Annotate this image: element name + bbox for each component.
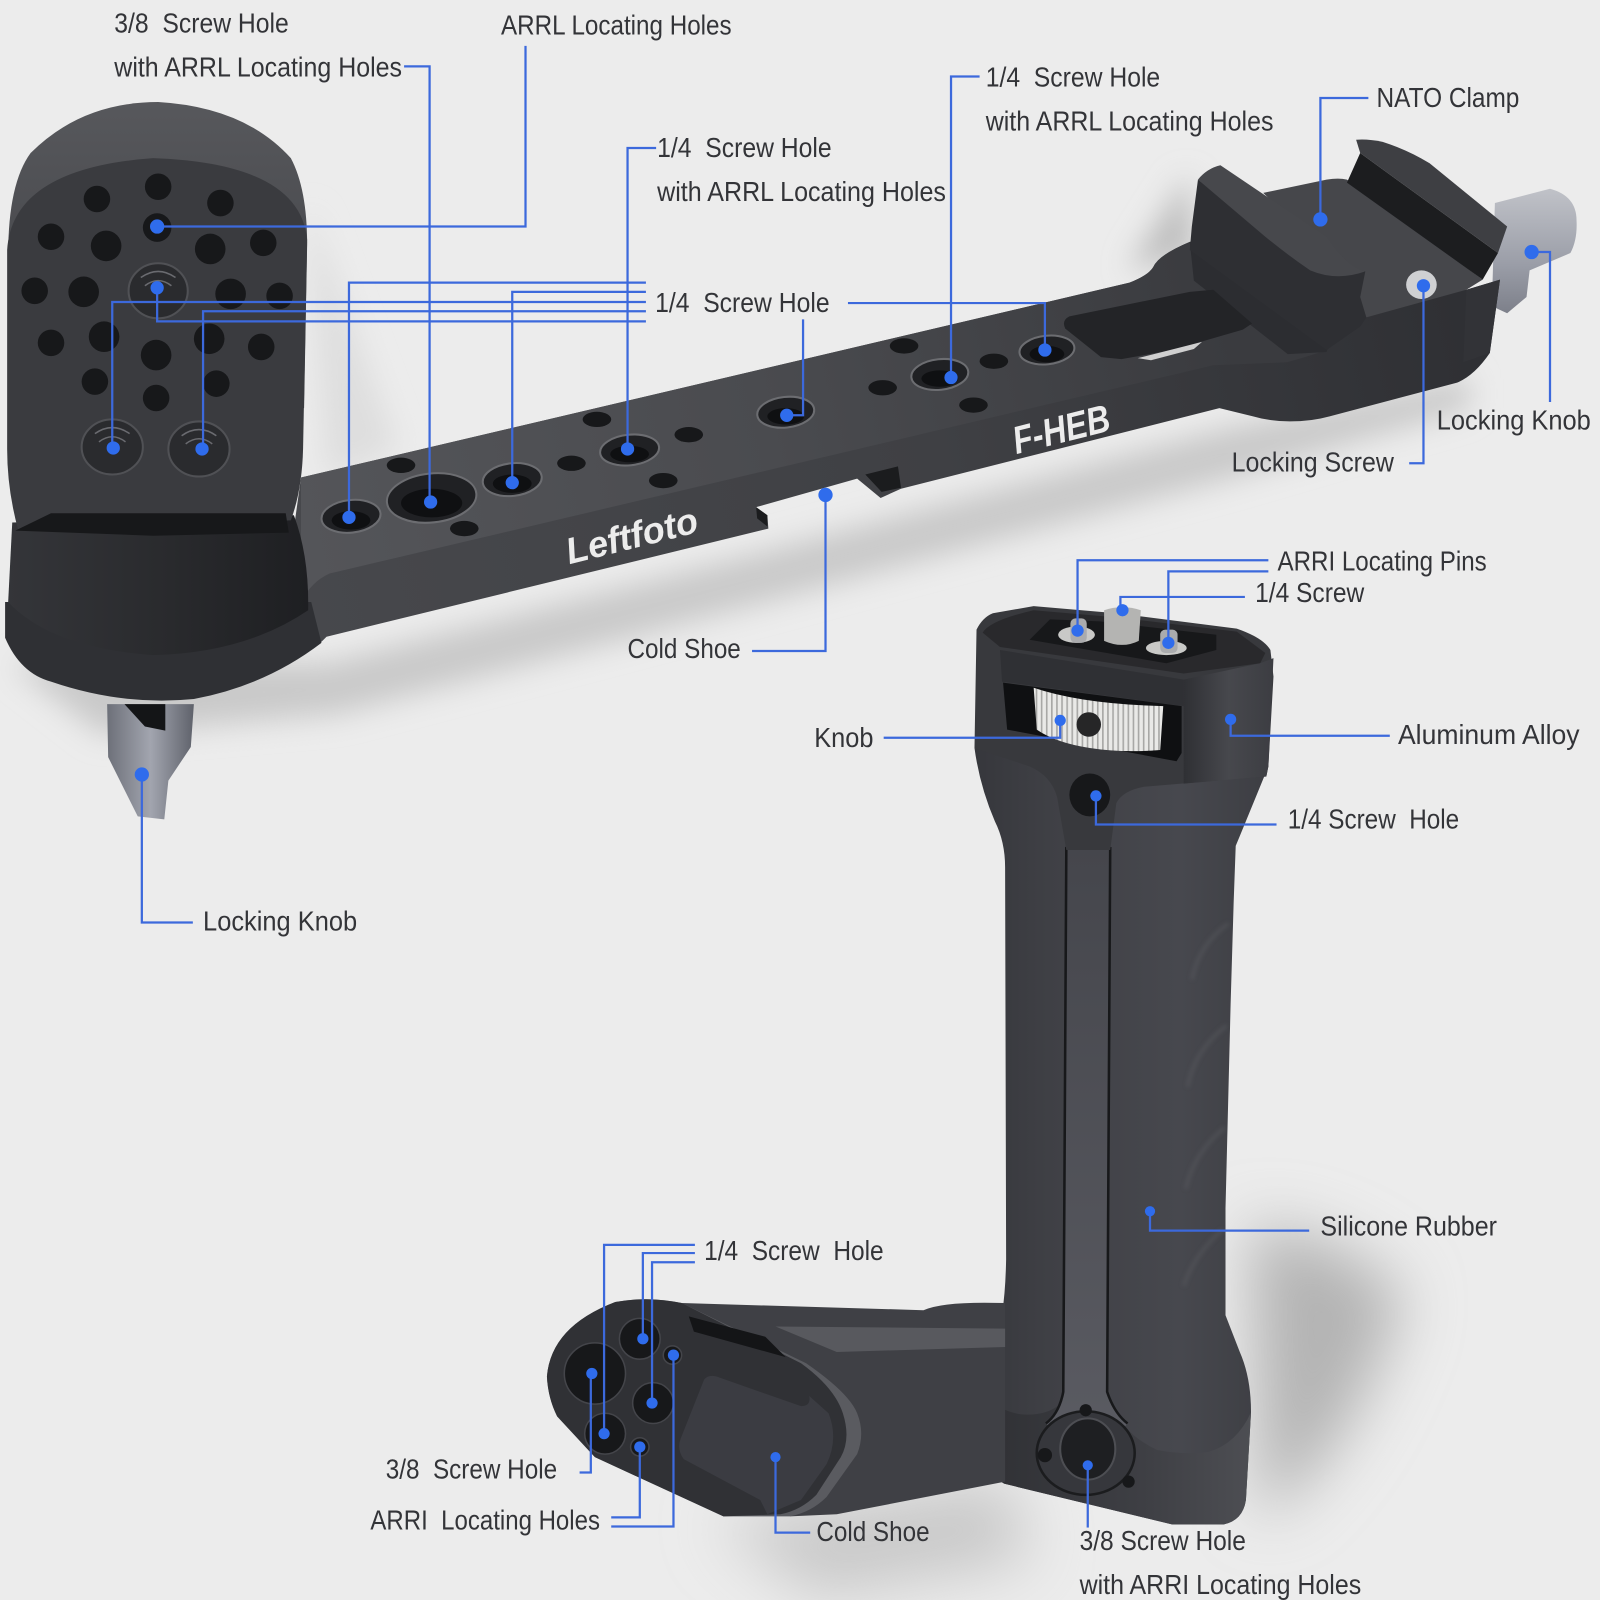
product: mounting arm <box>107 140 1577 819</box>
label: Cold Shoe <box>628 633 741 664</box>
label: Locking Knob <box>1437 405 1591 436</box>
callout: locking screw <box>1232 279 1430 477</box>
callout: ARRL locating holes <box>150 10 732 234</box>
label: Locking Screw <box>1232 446 1394 477</box>
callout: cold shoe arm <box>628 488 833 664</box>
label: Locking Knob <box>203 906 357 937</box>
leader <box>752 495 826 651</box>
arm top face <box>301 242 1327 602</box>
leader <box>1409 286 1423 463</box>
label: Knob <box>814 722 873 753</box>
callout: NATO clamp <box>1313 82 1519 227</box>
leader <box>157 46 526 227</box>
callout: 3/8 screw hole lower <box>386 1368 597 1485</box>
front panel <box>1000 650 1184 706</box>
callout: 3/8 screw hole top: with ARRL Locating Holes <box>113 52 402 83</box>
end face rim <box>547 1299 861 1516</box>
callout: ARRI locating holes lower <box>370 1349 679 1536</box>
arm small holes <box>387 338 1008 536</box>
label: ARRI Locating Pins <box>1278 545 1487 576</box>
leader <box>628 148 656 449</box>
callout: silicone rubber <box>1145 1206 1497 1242</box>
leaders <box>112 283 1045 517</box>
rear knob <box>1492 189 1577 313</box>
end face <box>547 1299 846 1516</box>
callout: 3/8 screw hole bottom: with ARRI Locating Holes <box>1079 1569 1361 1600</box>
handle top block <box>974 606 1273 850</box>
leaders <box>611 1355 673 1527</box>
label: Cold Shoe <box>816 1516 930 1547</box>
callout: locking knob right <box>1437 245 1591 436</box>
leader <box>884 720 1060 738</box>
locking screw <box>1406 270 1437 299</box>
bottom hole ring <box>1037 1411 1135 1495</box>
callout: 1/4 screw hole group <box>107 281 1052 524</box>
label: Aluminum Alloy <box>1398 719 1580 750</box>
head face <box>7 158 307 531</box>
callout: 1/4 screw hole with locating holes, right: with ARRL Locating Holes <box>985 106 1273 137</box>
label: ARRI Locating Holes <box>370 1505 600 1536</box>
handle body <box>974 748 1268 1524</box>
leader <box>1320 98 1368 219</box>
callout: aluminum alloy <box>1225 714 1580 750</box>
horizontal handle body <box>682 1303 1005 1516</box>
callout: 1/4 screw hole with locating holes, right <box>944 62 1273 384</box>
head dome <box>8 102 307 408</box>
product: lower horizontal handle <box>547 1299 1005 1516</box>
wedge <box>15 513 289 536</box>
model: F-HEB: F-HEB <box>1008 397 1115 463</box>
callout: 1/4 screw hole handle <box>1090 790 1459 835</box>
callout: 1/4 screw hole with locating holes, center: with ARRL Locating Holes <box>656 176 946 207</box>
NATO clamp left jaw front <box>1190 180 1366 350</box>
callout: 1/4 screw hole with locating holes, center <box>621 132 946 456</box>
cold shoe slot <box>689 1316 786 1357</box>
NATO clamp plate <box>1263 179 1483 317</box>
leader <box>1120 597 1245 610</box>
product: head plate <box>5 102 321 701</box>
bottom ring notches <box>1038 1404 1135 1488</box>
label: Silicone Rubber <box>1320 1211 1497 1242</box>
label: NATO Clamp <box>1377 82 1519 113</box>
leaders <box>1078 560 1268 643</box>
leader <box>1231 719 1390 736</box>
grip ridges <box>1184 923 1229 1286</box>
flange ridge <box>1190 237 1332 354</box>
callout: 1/4 screw hole lower <box>598 1235 884 1439</box>
head hole threads <box>95 271 216 444</box>
top plate <box>983 610 1265 673</box>
leader <box>1087 1465 1089 1528</box>
top screw hole <box>1069 773 1110 816</box>
label: 1/4 Screw <box>1255 577 1364 608</box>
end face holes <box>564 1318 682 1456</box>
knob hole <box>1077 712 1101 737</box>
leader <box>142 774 193 922</box>
callout: locking knob left <box>135 767 357 937</box>
leader <box>580 1373 591 1472</box>
center strip <box>1046 847 1128 1469</box>
label: 3/8 Screw Hole <box>386 1454 557 1485</box>
knob window <box>1003 683 1182 761</box>
arm threaded holes <box>320 333 1076 536</box>
leaders <box>604 1245 695 1434</box>
callout: knob <box>814 715 1066 753</box>
brand: Leftfoto: Leftfoto <box>561 500 702 572</box>
label: 1/4 Screw Hole <box>986 62 1160 93</box>
NATO clamp right jaw <box>1347 153 1498 280</box>
leader <box>1532 252 1550 402</box>
label: ARRL Locating Holes <box>501 10 732 41</box>
right cheek of top block <box>1184 658 1273 784</box>
handle top highlight <box>776 1327 1005 1352</box>
callout: 3/8 screw hole bottom <box>1079 1460 1361 1600</box>
label: 3/8 Screw Hole <box>1080 1525 1246 1556</box>
top plate recess <box>1030 619 1216 663</box>
label: 1/4 Screw Hole <box>657 132 832 163</box>
cold shoe recess <box>679 1376 833 1514</box>
callout: 1/4 screw <box>1116 577 1364 616</box>
leader <box>1096 796 1277 824</box>
arm band <box>286 242 1500 653</box>
label: 1/4 Screw Hole <box>655 287 830 318</box>
head base lower disc <box>5 602 321 701</box>
bottom threaded hole <box>1060 1418 1115 1480</box>
label: 1/4 Screw Hole <box>1288 804 1459 835</box>
callout: ARRI locating pins <box>1071 545 1487 649</box>
callout: 3/8 screw hole top <box>113 8 437 509</box>
slot <box>1064 290 1252 359</box>
cold shoe rails <box>756 466 901 527</box>
end block <box>1463 280 1500 362</box>
leader <box>1150 1211 1309 1231</box>
arm hole threads <box>332 346 1064 530</box>
knob wheel <box>1034 688 1163 751</box>
leader <box>776 1457 810 1533</box>
leader <box>951 77 980 378</box>
head threaded holes <box>82 263 230 477</box>
head base cylinder <box>8 515 308 655</box>
label: 1/4 Screw Hole <box>704 1235 884 1266</box>
leader <box>404 66 430 502</box>
locking knob lower <box>107 704 194 819</box>
product: vertical handle <box>974 606 1273 1524</box>
NATO clamp left jaw top <box>1198 165 1365 276</box>
head small holes <box>21 173 293 411</box>
locating pins and screw <box>1058 627 1095 643</box>
callout: cold shoe lower <box>770 1452 930 1547</box>
label: 3/8 Screw Hole <box>114 8 289 39</box>
handle bottom block <box>981 1389 1251 1524</box>
